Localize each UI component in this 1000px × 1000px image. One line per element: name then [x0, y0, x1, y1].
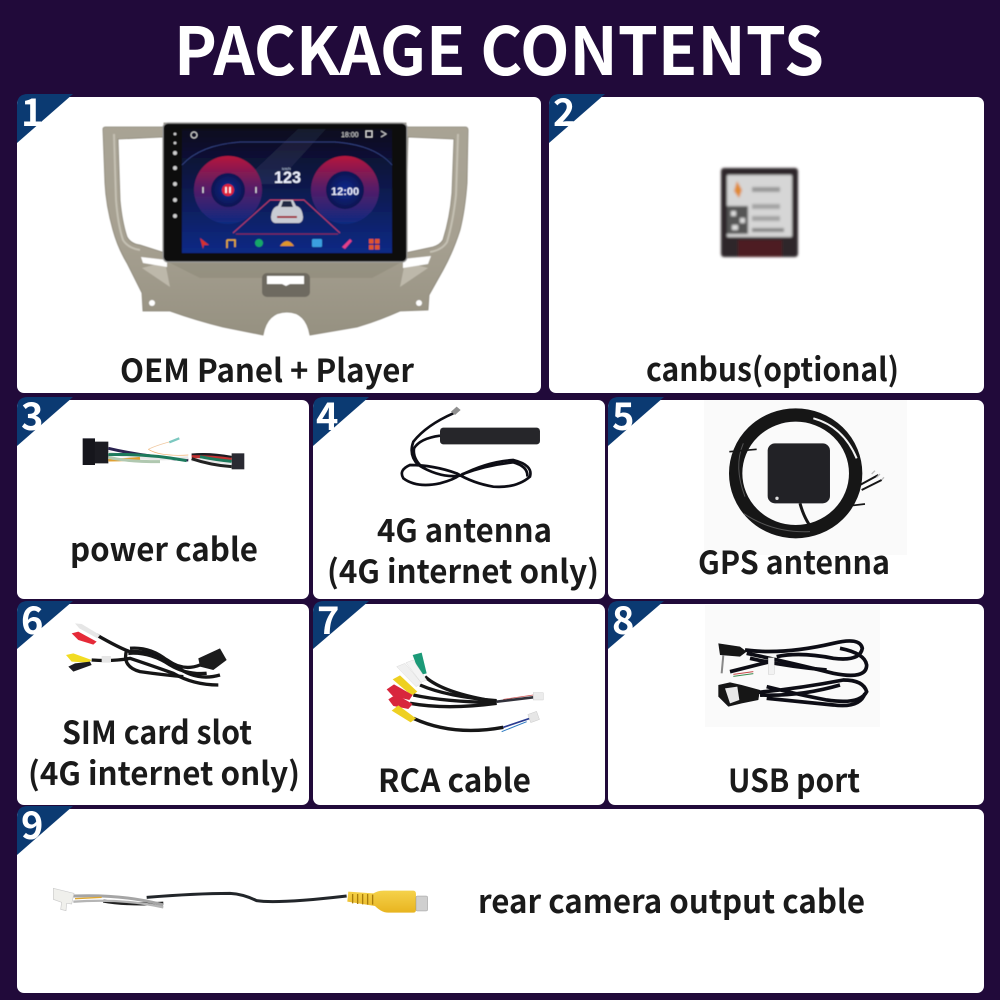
image: dash panel with head unit [103, 123, 468, 335]
badge 7 [313, 590, 369, 649]
centre slot [262, 273, 310, 297]
panel 9: rear camera output cable [17, 795, 984, 993]
image: GPS antenna [729, 415, 884, 532]
photo backdrop [704, 400, 907, 555]
panel 7: RCA cable [313, 590, 605, 805]
slot opening [267, 276, 304, 286]
panel 1: OEM panel and player [17, 82, 541, 393]
label 6: SIM card slot [62, 708, 252, 754]
status bar: 18:00 [341, 132, 359, 139]
label 2: canbus(optional) [646, 345, 899, 391]
label 3: power cable [70, 525, 258, 571]
badge 4 [313, 386, 369, 446]
badge 3 [17, 386, 73, 446]
badge 5: 5 [612, 386, 634, 441]
badge 2 [549, 82, 605, 143]
label 6 [28, 708, 300, 795]
right dial: 12:00 [331, 186, 359, 198]
display [182, 129, 392, 253]
image: canbus box [721, 168, 798, 257]
vents [141, 256, 431, 268]
left dial [194, 156, 262, 224]
bezel lighter rim [114, 134, 458, 252]
image: SIM cable [66, 623, 227, 685]
head unit frame [163, 123, 407, 262]
panel 5: GPS antenna [608, 386, 984, 599]
speed readout: 123 [274, 168, 301, 187]
panel 3: power cable [17, 386, 309, 599]
photo backdrop [705, 605, 880, 727]
car on screen [271, 200, 303, 223]
badge 1 [17, 82, 73, 143]
side buttons [173, 133, 177, 218]
label 7: RCA cable [378, 756, 531, 802]
dash bezel [103, 123, 468, 335]
side vent shading [142, 262, 428, 287]
image: 4G antenna [402, 407, 540, 487]
label 4: 4G antenna [377, 506, 552, 552]
label 4: (4G internet only) [327, 547, 599, 593]
badge 1: 1 [21, 82, 43, 137]
badge 6: 6 [21, 590, 43, 645]
label 1: OEM Panel + Player [120, 346, 414, 392]
status bar [191, 131, 386, 139]
badge 3: 3 [21, 386, 43, 441]
panel 2: canbus [549, 82, 984, 393]
badge 8: 8 [612, 590, 634, 645]
badge 9: 9 [21, 795, 43, 850]
image: USB cables [718, 641, 867, 707]
badge 5 [608, 386, 664, 446]
label 8: USB port [728, 756, 860, 802]
label 5: GPS antenna [698, 538, 890, 584]
title: PACKAGE CONTENTS [174, 0, 824, 95]
screen glare [240, 129, 326, 184]
badge 4: 4 [316, 386, 338, 441]
panel 8: USB port [608, 590, 984, 805]
image: RCA harness [387, 653, 543, 732]
speed readout: km/h [282, 166, 291, 171]
panel 4: 4G antenna [313, 386, 605, 599]
right dial [311, 156, 379, 224]
mounting holes [149, 300, 422, 306]
image: rear camera cable [53, 888, 428, 913]
road lines [233, 200, 340, 233]
bezel lower shading [170, 263, 400, 278]
label 9: rear camera output cable [478, 877, 865, 923]
badge 8 [608, 590, 664, 649]
label 4 [327, 506, 599, 593]
badge 6 [17, 590, 73, 649]
image: power harness [83, 438, 244, 469]
label 6: (4G internet only) [28, 749, 300, 795]
badge 9 [17, 795, 73, 855]
app icons [200, 238, 380, 250]
badge 7: 7 [317, 590, 339, 645]
panel 6: SIM card slot [17, 590, 309, 805]
badge 2: 2 [553, 82, 575, 137]
